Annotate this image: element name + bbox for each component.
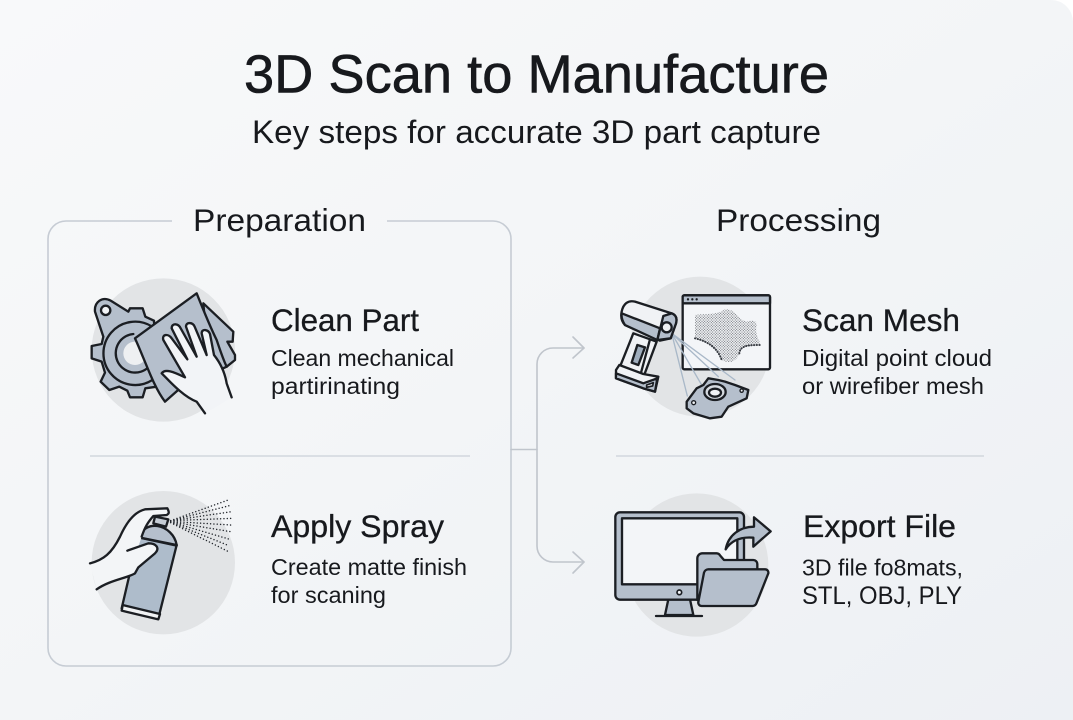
icon: export file <box>615 493 771 637</box>
text: scan mesh <box>802 302 992 399</box>
text: clean part <box>271 302 454 399</box>
text: apply spray: for scaning <box>271 582 386 608</box>
text: apply spray: Create matte finish <box>271 554 467 580</box>
icon: scan mesh <box>616 277 770 418</box>
heading: processing: Processing <box>716 202 881 238</box>
text: export file: 3D file fo8mats, <box>802 554 963 580</box>
text: scan mesh: or wirefiber mesh <box>802 373 984 399</box>
arrow: connector to processing steps <box>511 337 584 573</box>
arrow: export <box>726 517 771 549</box>
scanned part <box>687 378 748 418</box>
text: apply spray: Apply Spray <box>271 508 444 544</box>
text: clean part: partirinating <box>271 373 400 399</box>
text: clean part: Clean Part <box>271 302 419 338</box>
icon: clean part <box>92 278 235 422</box>
monitor <box>615 512 744 616</box>
scanner body <box>619 333 657 377</box>
folder <box>697 553 768 606</box>
text: scan mesh: Digital point cloud <box>802 345 992 371</box>
text: apply spray <box>271 508 467 608</box>
heading: preparation: Preparation <box>193 202 366 238</box>
text: export file <box>802 508 963 610</box>
title: 3D Scan to Manufacture <box>244 44 829 104</box>
panel: preparation frame <box>48 221 511 666</box>
text: clean part: Clean mechanical <box>271 345 454 371</box>
subtitle: Key steps for accurate 3D part capture <box>252 114 821 150</box>
text: export file: Export File <box>803 508 956 544</box>
screen window <box>683 295 770 369</box>
text: export file: STL, OBJ, PLY <box>802 582 962 610</box>
icon: apply spray <box>90 491 235 634</box>
text: scan mesh: Scan Mesh <box>802 302 960 338</box>
